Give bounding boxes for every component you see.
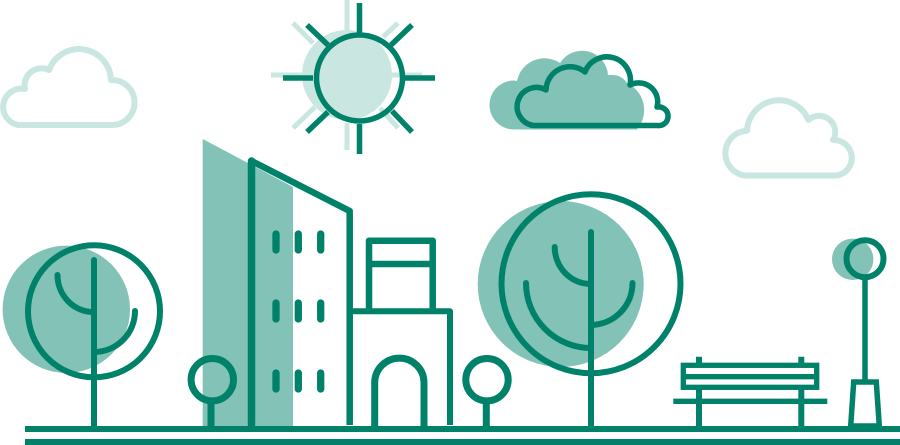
lamp base <box>851 382 879 426</box>
building: low block with arch door <box>349 241 450 426</box>
cloud outline <box>517 57 668 126</box>
bench legs <box>699 357 801 427</box>
sun pale rays <box>271 0 422 150</box>
lamp pole <box>862 277 868 383</box>
canopy outline <box>28 245 160 377</box>
icon: street lamp <box>832 239 884 426</box>
canopy outline <box>502 194 680 373</box>
icon: sun <box>271 0 435 154</box>
tree: small right <box>466 358 508 427</box>
cloud: pale left outline <box>3 49 135 125</box>
cloud shade <box>490 51 644 130</box>
tower outline <box>252 161 350 425</box>
sun outline <box>316 35 402 121</box>
canopy shade <box>478 201 644 367</box>
bench back <box>683 365 817 387</box>
tower shade <box>203 139 293 426</box>
bench seat <box>673 399 827 404</box>
tree: small left <box>191 358 234 427</box>
ground lines <box>25 426 900 445</box>
arch door <box>375 358 424 426</box>
cloud: centre filled <box>490 51 668 130</box>
rooftop box <box>369 241 433 311</box>
lamp shade <box>832 239 873 280</box>
sun pale disc <box>302 30 392 120</box>
block outline <box>349 311 450 425</box>
sun dark rays <box>283 3 435 154</box>
lamp globe <box>846 240 884 277</box>
building: tall tower <box>203 139 350 426</box>
cloud: pale right outline <box>725 100 852 176</box>
icon: park bench <box>673 357 827 427</box>
canopy shade <box>3 246 130 373</box>
tree: large left <box>3 245 160 428</box>
tree: large centre <box>478 194 680 428</box>
trunk and branches <box>91 260 97 428</box>
tower windows <box>276 234 321 389</box>
trunk and branches <box>588 232 594 428</box>
